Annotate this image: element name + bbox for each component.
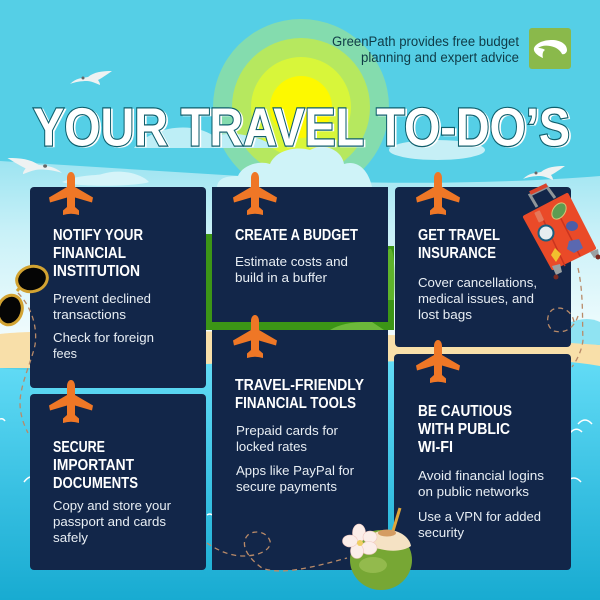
background: far water	[571, 319, 600, 345]
heading: NOTIFY YOUR	[53, 227, 143, 244]
text block: fees	[53, 346, 77, 361]
text block: on public networks	[418, 484, 530, 499]
heading: GET TRAVEL	[418, 227, 500, 244]
heading: CREATE A BUDGET	[235, 227, 358, 244]
text block: Check for foreign	[53, 330, 154, 345]
icon: sun	[213, 19, 389, 195]
heading: BE CAUTIOUS	[418, 403, 512, 420]
panel: notify your financial institution	[30, 187, 206, 388]
heading: IMPORTANT	[53, 457, 134, 474]
panel: create a budget	[212, 187, 388, 322]
icon: GreenPath logo	[529, 28, 571, 69]
icon: airplane, notify	[49, 172, 93, 215]
heading: TRAVEL-FRIENDLY	[235, 377, 365, 394]
icon: airplane, budget	[233, 172, 277, 215]
heading: FINANCIAL	[53, 245, 126, 262]
bird: right	[523, 166, 565, 180]
icon: airplane, documents	[49, 380, 93, 423]
text block: Prevent declined	[53, 291, 151, 306]
heading	[418, 403, 512, 456]
text block: lost bags	[418, 307, 473, 322]
bird: top left	[70, 71, 112, 85]
text block: locked rates	[236, 439, 308, 454]
background: sea	[0, 359, 600, 600]
text block: safely	[53, 530, 89, 545]
flower	[342, 524, 377, 558]
icon: red suitcase	[525, 185, 600, 280]
heading: DOCUMENTS	[53, 475, 138, 492]
text block: Prepaid cards for	[236, 423, 339, 438]
icon: airplane, tools	[233, 315, 277, 358]
callout: GreenPath message: GreenPath provides free budget	[332, 34, 519, 49]
text block: Copy and store your	[53, 498, 172, 513]
text block: Avoid financial logins	[418, 468, 545, 483]
heading: INSTITUTION	[53, 263, 140, 280]
dashed route: left	[18, 293, 36, 433]
heading: INSURANCE	[418, 245, 496, 262]
text block	[53, 498, 172, 545]
panel: be cautious with public wi-fi	[394, 354, 571, 570]
stickers	[534, 200, 583, 262]
dashed route: right	[548, 268, 583, 367]
icon: airplane, wi-fi	[416, 340, 460, 383]
text block: passport and cards	[53, 514, 166, 529]
text block: security	[418, 525, 465, 540]
heading	[235, 377, 365, 412]
text block: Cover cancellations,	[418, 275, 537, 290]
text block: Use a VPN for added	[418, 509, 541, 524]
text block	[53, 291, 154, 361]
heading: SECURE	[53, 439, 105, 456]
heading: WITH PUBLIC	[418, 421, 510, 438]
text block: secure payments	[236, 479, 338, 494]
heading: FINANCIAL TOOLS	[235, 395, 356, 412]
callout: GreenPath message: planning and expert advice	[361, 50, 519, 65]
text block: Apps like PayPal for	[236, 463, 355, 478]
text block	[235, 254, 348, 285]
panel: travel-friendly financial tools	[212, 330, 388, 570]
text block	[418, 468, 545, 540]
icon: sunglasses	[0, 263, 50, 328]
text block	[236, 423, 355, 494]
icon: coconut drink	[342, 508, 412, 590]
text block	[418, 275, 537, 322]
background: island beach	[0, 331, 600, 368]
heading: WI-FI	[418, 439, 453, 456]
panel: get travel insurance	[395, 187, 571, 347]
text block: Estimate costs and	[235, 254, 348, 269]
callout: GreenPath message	[332, 34, 519, 65]
dashed route: bottom	[207, 532, 347, 571]
background: palms	[206, 234, 394, 330]
text block: build in a buffer	[235, 270, 328, 285]
text block: medical issues, and	[418, 291, 534, 306]
text block: transactions	[53, 307, 127, 322]
background: horizon haze	[0, 161, 600, 340]
panel: secure important documents	[30, 394, 206, 570]
icon: airplane, insurance	[416, 172, 460, 215]
heading	[418, 227, 500, 262]
heading	[53, 439, 138, 492]
background: clouds	[62, 127, 485, 187]
background: small gulls over the sea	[0, 419, 592, 515]
heading	[53, 227, 143, 280]
bird: left	[7, 158, 62, 174]
